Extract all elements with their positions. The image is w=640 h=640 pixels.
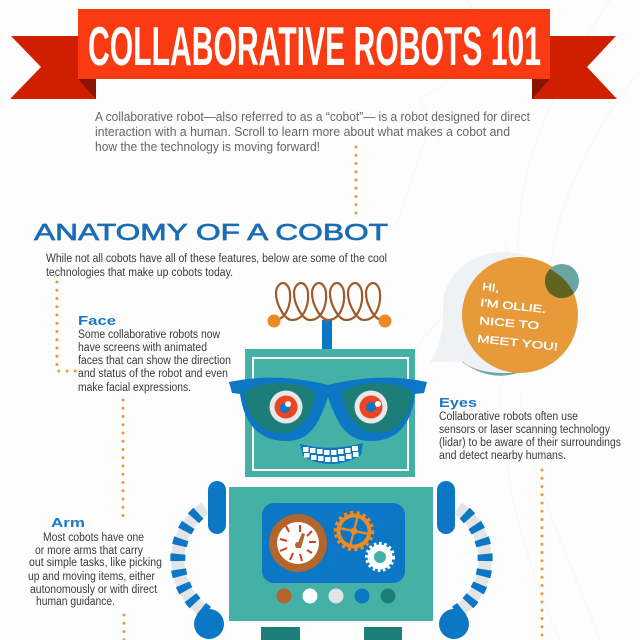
left eye (270, 390, 302, 424)
face callout: make facial expressions. (78, 382, 191, 394)
title banner (10, 9, 617, 99)
right eye (354, 390, 388, 424)
head (245, 349, 415, 477)
bubble shadow (462, 358, 530, 376)
legs (261, 627, 402, 640)
face callout: Some collaborative robots now (78, 329, 221, 341)
arm callout: or more arms that carry (35, 545, 143, 557)
right arm (437, 481, 485, 639)
bubble greeting: HI, (482, 281, 500, 295)
arm callout: out simple tasks, like picking (29, 557, 162, 569)
orange gear (336, 512, 372, 550)
clock gauge (269, 514, 327, 572)
intro paragraph (95, 109, 530, 154)
face callout: and status of the robot and even (78, 368, 228, 380)
dotted connector lines (57, 147, 542, 640)
chest panel (262, 503, 405, 583)
bubble greeting: NICE TO (479, 315, 540, 332)
arm callout (28, 516, 162, 608)
glasses (229, 378, 427, 441)
bubble greeting: MEET YOU! (477, 333, 558, 353)
intro paragraph: how the the technology is moving forward! (95, 139, 320, 154)
antenna (268, 283, 392, 350)
teal circle (545, 264, 579, 298)
left ribbon tail (10, 36, 96, 99)
orange circle (462, 257, 578, 373)
eyes callout: and detect nearby humans. (439, 450, 566, 462)
eyes callout (439, 396, 621, 462)
section description: While not all cobots have all of these features, below are some of the cool (46, 253, 387, 265)
bubble greeting (477, 281, 558, 353)
arm callout: Arm (51, 516, 85, 530)
mouth (300, 443, 363, 464)
face callout: Face (78, 314, 116, 328)
bubble greeting: I'M OLLIE. (480, 297, 547, 316)
intro paragraph: interaction with a human. Scroll to learn more about what makes a cobot and (95, 124, 510, 139)
bubble body (430, 252, 565, 373)
speech bubble (430, 252, 579, 376)
arm callout: human guidance. (36, 596, 115, 608)
section description: technologies that make up cobots today. (46, 267, 233, 279)
intro paragraph: A collaborative robot—also referred to as a “cobot”— is a robot designed for direct (95, 109, 530, 124)
eyes callout: (lidar) to be aware of their surroundings (439, 437, 621, 449)
torso (229, 487, 433, 621)
arm callout: autonomously or with direct (30, 584, 158, 596)
section description (46, 253, 387, 279)
eyes callout: Collaborative robots often use (439, 411, 578, 423)
face callout: have screens with animated (78, 342, 207, 354)
left arm (178, 481, 226, 639)
arm callout: Most cobots have one (43, 532, 144, 544)
control buttons (276, 588, 396, 604)
arm callout: up and moving items, either (28, 571, 155, 583)
face callout (78, 314, 231, 394)
white gear (366, 544, 394, 570)
eyes callout: Eyes (439, 396, 477, 410)
right ribbon tail (532, 36, 617, 99)
robot illustration (178, 283, 485, 640)
eyes callout: sensors or laser scanning technology (439, 424, 610, 436)
face callout: faces that can show the direction (78, 355, 231, 367)
section heading: anatomy of a cobot: ANATOMY OF A COBOT (34, 219, 388, 245)
